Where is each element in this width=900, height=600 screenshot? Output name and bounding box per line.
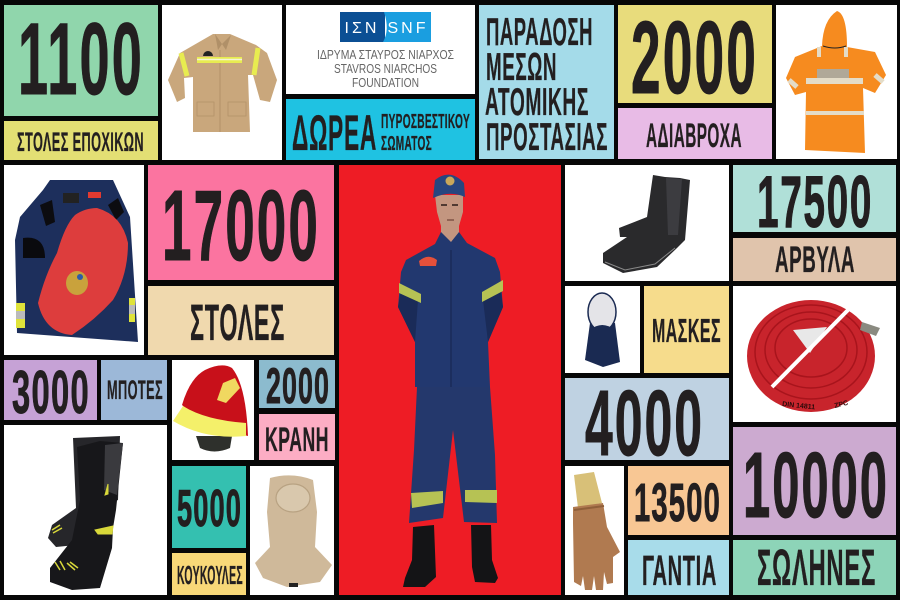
panel: mask photo (565, 286, 640, 373)
number: 2000: 2000 (631, 0, 758, 115)
icon: orange raincoat (786, 11, 886, 153)
number: 2000: 2000 (266, 358, 330, 414)
panel: 17500 boots count (733, 162, 896, 243)
panel: 17000 uniforms count (148, 165, 334, 282)
panel: seasonal uniforms label: ΣΤΟΛΕΣ ΕΠΟΧΙΚΩΝ (17, 127, 144, 157)
panel: helmet photo (172, 360, 254, 460)
panel: helmets label (259, 414, 335, 460)
panel: fire hose photo (733, 286, 896, 422)
text block: ΑΤΟΜΙΚΗΣ (485, 81, 589, 124)
text block: ΠΑΡΑΔΟΣΗ (486, 11, 593, 54)
panel: raincoat photo (776, 5, 897, 159)
panel: masks label: ΜΑΣΚΕΣ (652, 312, 721, 349)
foundation name: STAVROS NIARCHOS (334, 61, 437, 76)
panel: low boots photo (565, 165, 729, 281)
subheading: ΣΩΜΑΤΟΣ (381, 133, 432, 155)
panel: tall boots photo (4, 425, 167, 595)
icon: beige fire hood (255, 475, 332, 587)
panel: delivery of protective equipment (479, 5, 614, 159)
icon: red fire hose: ZPC (834, 400, 849, 410)
icon: ΙΣΝ SNF logo: SNF (388, 20, 428, 37)
text block (485, 11, 608, 159)
panel: raincoats label: ΑΔΙΑΒΡΟΧΑ (646, 117, 742, 155)
panel: hoses label (733, 539, 896, 596)
panel: central red panel with firefighter (339, 165, 561, 595)
icon: red helmet (173, 365, 248, 452)
panel: 13500 gloves count (628, 466, 729, 535)
panel: foundation logo (286, 5, 475, 94)
number: 3000: 3000 (12, 359, 90, 426)
subheading: ΠΥΡΟΣΒΕΣΤΙΚΟΥ (381, 111, 470, 133)
panel: folded navy uniform and red cap photo (4, 165, 144, 355)
foundation name (317, 47, 454, 90)
icon: red fire hose: DIN 14811 (782, 401, 816, 411)
panel: hood photo (250, 466, 334, 595)
panel: 10000 hoses count (733, 427, 896, 537)
panel: 2000 helmets count (259, 358, 335, 414)
icon: tall fire boots (48, 436, 123, 590)
subheading (381, 111, 470, 155)
icon: firefighter in navy uniform (398, 175, 503, 587)
icon: folded navy shirt (15, 180, 138, 342)
panel: boots label (101, 360, 167, 420)
panel: seasonal uniforms label (4, 121, 158, 160)
number: 5000: 5000 (177, 480, 242, 538)
panel: uniforms label (148, 286, 334, 355)
panel: 2000 raincoats count (618, 0, 772, 115)
number: 13500: 13500 (634, 473, 721, 533)
panel: raincoats label (618, 108, 772, 159)
panel: donation heading: ΔΩΡΕΑ (292, 105, 377, 161)
panel: gloves label: ΓΑΝΤΙΑ (642, 547, 717, 595)
icon: ΙΣΝ SNF logo: ΙΣΝ (345, 20, 379, 37)
panel: 5000 hoods count (172, 466, 246, 548)
icon: red fire hose (747, 300, 880, 412)
icon: navy mask (585, 293, 620, 367)
panel: 1100 count (4, 2, 158, 116)
panel: tan jacket photo (162, 5, 282, 160)
text block: ΜΕΣΩΝ (486, 46, 557, 89)
panel: 4000 masks count (565, 371, 729, 475)
panel: gloves label (628, 540, 729, 595)
icon: leather glove (573, 472, 620, 590)
foundation name: ΙΔΡΥΜΑ ΣΤΑΥΡΟΣ ΝΙΑΡΧΟΣ (317, 47, 454, 62)
icon: ΙΣΝ SNF logo (340, 12, 431, 42)
foundation name: FOUNDATION (352, 75, 419, 90)
icon: lace-up boots (603, 175, 690, 273)
panel: hoods label (172, 553, 246, 595)
panel: masks label (644, 286, 729, 373)
icon: red cap (38, 208, 128, 335)
panel: delivery of protective equipment: ΠΡΟΣΤΑΣΙΑΣ (486, 116, 608, 159)
label: ΚΡΑΝΗ (265, 421, 329, 459)
panel: boots label: ΜΠΟΤΕΣ (107, 375, 163, 405)
text: ΚΟΥΚΟΥΛΕΣ (177, 560, 243, 590)
panel: glove photo (565, 466, 624, 595)
number: 17000: 17000 (162, 170, 320, 282)
panel: boots label (733, 238, 896, 281)
panel: 3000 boots count (4, 359, 97, 426)
icon: tan jacket (168, 34, 277, 132)
number: 1100: 1100 (18, 2, 144, 116)
number: 4000: 4000 (585, 371, 704, 475)
panel: uniforms label: ΣΤΟΛΕΣ (190, 294, 285, 351)
